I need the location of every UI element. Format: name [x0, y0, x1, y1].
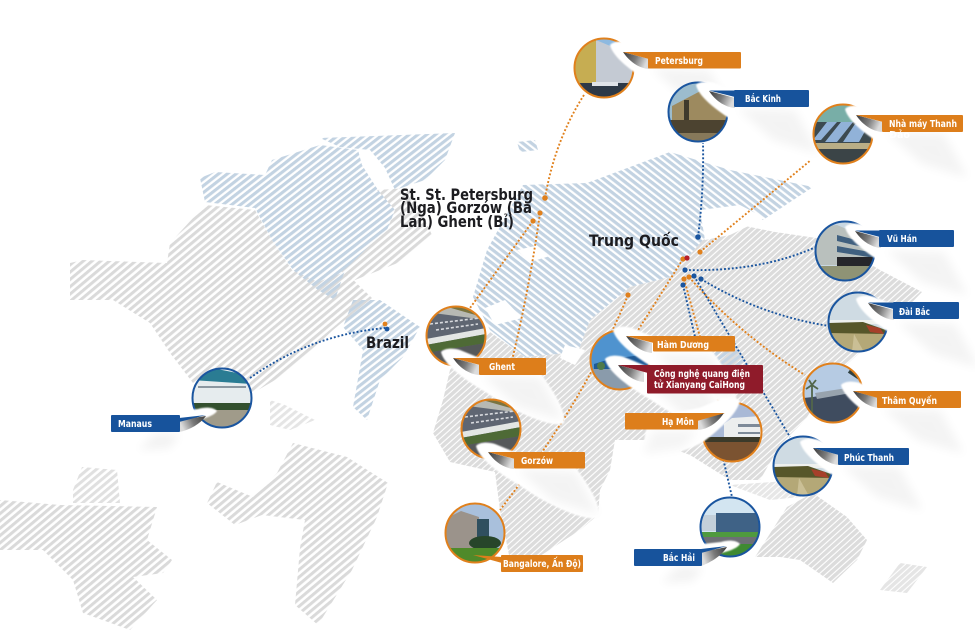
label: Nhà máy Thanh Đảo [856, 115, 963, 141]
heading: Trung Quốc: Trung Quốc [589, 231, 679, 250]
label: Nhà máy Thanh Đảo: Đảo [889, 130, 910, 141]
site: Ghent [426, 306, 564, 424]
photo: Phúc Thanh factory [773, 436, 833, 496]
label: Petersburg [623, 52, 741, 69]
site: Manaus [111, 368, 252, 450]
photo: Thâm Quyến factory [803, 363, 863, 423]
site: Nhà máy Thanh Đảo [812, 104, 963, 170]
label: Bắc Kinh [709, 90, 809, 108]
site: Phúc Thanh [772, 436, 912, 502]
photo: Thanh Đảo factory [813, 104, 873, 164]
label: Phúc Thanh [813, 448, 909, 465]
label: Vũ Hán: Vũ Hán [887, 234, 917, 245]
label: Bắc Kinh: Bắc Kinh [745, 94, 781, 105]
site: Gorzów [461, 399, 599, 518]
label: Công nghệ quang điện từ Xianyang CaiHong: tử Xianyang CaiHong [654, 380, 745, 391]
label: Công nghệ quang điện từ Xianyang CaiHong: Công nghệ quang điện [654, 369, 750, 380]
site: Hạ Môn [625, 398, 762, 462]
photo: Vũ Hán factory [815, 221, 875, 281]
map: Eurasia blue hatch [473, 140, 813, 375]
heading: St. Petersburg, Gorzów, Ghent: St. St. Petersburg [400, 185, 533, 204]
label: Đài Bắc [868, 302, 959, 320]
label: Bangalore, Ấn Độ: Bangalore, Ấn Độ) [503, 557, 581, 570]
photo: Petersburg factory [574, 38, 634, 98]
site: Bắc Kinh [668, 82, 809, 146]
world map background [0, 133, 927, 630]
map: Americas grey hatch [0, 188, 432, 630]
label: Ghent: Ghent [489, 362, 515, 373]
site: Bangalore [445, 503, 583, 572]
site: Hàm Dương and Xianyang CaiHong [590, 326, 763, 413]
photo: Bangalore factory [445, 503, 505, 563]
heading: St. Petersburg, Gorzów, Ghent [400, 185, 533, 231]
location dots [383, 195, 704, 331]
photo: Hạ Môn factory [702, 402, 762, 462]
label: Hàm Dương: Hàm Dương [657, 340, 709, 351]
map: Eurasia, Africa, Australia grey hatch [433, 225, 927, 593]
map breaks [485, 205, 765, 365]
label: Hạ Môn: Hạ Môn [662, 417, 694, 428]
label: Gorzów: Gorzów [521, 456, 553, 467]
photo: Manaus factory [192, 368, 252, 428]
label: Manaus: Manaus [118, 419, 152, 430]
map: North America blue hatch [200, 133, 455, 420]
photo: Gorzów factory [461, 399, 521, 459]
heading: Brazil: Brazil [366, 333, 409, 352]
label: Vũ Hán [855, 230, 954, 248]
photo: Ghent factory [426, 306, 486, 366]
photo: Đài Bắc factory [828, 292, 888, 352]
site: Thâm Quyến [802, 362, 961, 446]
label: Công nghệ quang điện từ Xianyang CaiHong [618, 365, 763, 394]
heading: St. Petersburg, Gorzów, Ghent: Lan) Ghent (Bỉ) [400, 212, 514, 231]
dotted connector lines [250, 95, 829, 510]
site: Vũ Hán [814, 220, 957, 288]
label: Đài Bắc: Đài Bắc [899, 307, 930, 318]
photo: Bắc Kinh factory [668, 82, 728, 142]
label: Hàm Dương [626, 336, 735, 353]
label: Thâm Quyến: Thâm Quyến [882, 396, 937, 407]
label: Nhà máy Thanh Đảo: Nhà máy Thanh [889, 119, 957, 130]
label: Thâm Quyến [853, 391, 961, 408]
label: Bắc Hải: Bắc Hải [663, 553, 695, 564]
site: Đài Bắc [828, 292, 968, 360]
site: Petersburg [574, 38, 741, 98]
label: Petersburg: Petersburg [655, 56, 703, 67]
label: Manaus [111, 415, 206, 432]
photo: Bắc Hải factory [700, 497, 760, 557]
heading: St. Petersburg, Gorzów, Ghent: (Nga) Gorzów (Ba [400, 198, 532, 217]
photo: Hàm Dương factory [590, 330, 650, 390]
label: Phúc Thanh: Phúc Thanh [844, 453, 894, 464]
site: Bắc Hải [634, 497, 760, 583]
